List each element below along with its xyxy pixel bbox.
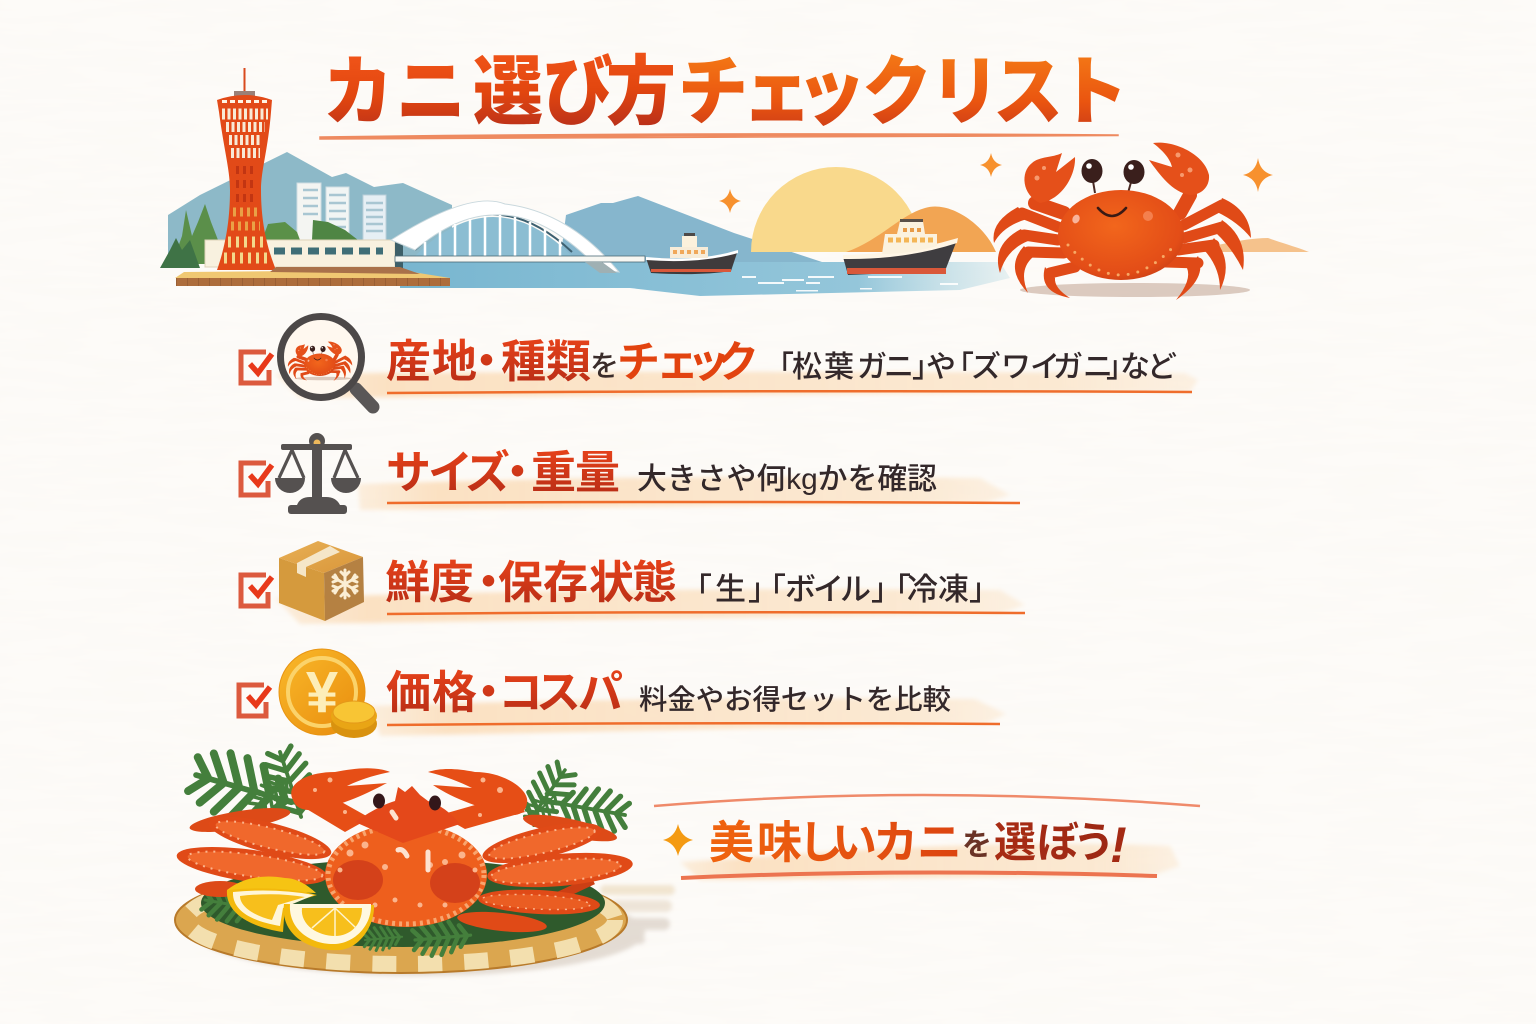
row 4 heading: 価格・コスパ	[386, 667, 623, 718]
row 1 heading check: チェック	[617, 339, 759, 387]
row 4 underline	[387, 723, 1000, 725]
office buildings	[297, 183, 386, 241]
crab platter	[175, 743, 675, 976]
crab legs right	[456, 809, 634, 936]
title: カニ選び方	[323, 51, 676, 135]
large ship	[843, 219, 958, 275]
closing message	[654, 795, 1200, 880]
bamboo plate	[175, 859, 627, 973]
row 1 underline	[387, 391, 1192, 393]
row 1 checkbox	[241, 352, 272, 383]
row 2 wash band	[358, 477, 1010, 510]
row 2 underline	[387, 502, 1020, 503]
plate shadow	[195, 885, 675, 976]
title: チェックリスト	[678, 51, 1128, 135]
low terminal building	[205, 240, 403, 268]
garnish sprigs	[185, 743, 631, 957]
row 3 checkbox	[241, 575, 272, 606]
small ship	[646, 233, 738, 274]
crab legs left	[175, 803, 335, 897]
row 1 particle: を	[590, 351, 619, 383]
arched bridge	[391, 201, 645, 273]
orange hills	[846, 206, 996, 252]
closing top stroke	[654, 795, 1200, 806]
row 3 detail: 「生」「ボイル」「冷凍」	[681, 572, 1000, 607]
checklist row 3	[241, 541, 1025, 624]
lemon wedges	[227, 876, 374, 950]
icon: yen coins	[279, 649, 377, 738]
pier	[175, 267, 450, 286]
row 3 heading: 鮮度・保存状態	[385, 557, 677, 608]
sparkle left	[719, 189, 741, 213]
row 2 checkbox	[241, 463, 272, 495]
row 4 detail: 料金やお得セットを比較	[639, 684, 951, 715]
setting sun	[751, 167, 921, 252]
row 1 detail: 「松葉ガニ」や「ズワイガニ」など	[764, 351, 1177, 384]
Kobe Port Tower	[217, 68, 276, 270]
title underline brush	[320, 134, 1118, 139]
smiling crab mascot	[994, 143, 1251, 300]
crab claws	[291, 768, 527, 832]
exclamation mark: !	[1110, 817, 1127, 873]
harbor water	[400, 262, 1010, 296]
green trees	[160, 204, 358, 268]
row 4 checkbox	[239, 685, 270, 716]
closing underline	[681, 872, 1157, 878]
water glints	[742, 276, 958, 292]
closing text red part: 美味しいカニ	[709, 817, 962, 868]
row 4 wash band	[370, 698, 1006, 736]
mountains behind bridge	[560, 196, 822, 262]
icon: magnifying glass with crab	[280, 316, 373, 407]
title	[323, 51, 1128, 135]
checklist row 1	[241, 316, 1198, 407]
icon: cold-storage box	[279, 541, 364, 621]
distant far-right hill	[1182, 238, 1309, 252]
sparkle near crab right	[1243, 158, 1273, 192]
row 2 detail: 大きさや何kgかを確認	[637, 463, 937, 496]
closing text particle: を	[962, 829, 992, 862]
Kobe harbor skyline	[160, 68, 1309, 296]
row 2 heading: サイズ・重量	[386, 447, 620, 498]
row 3 wash band	[275, 589, 1025, 624]
icon: balance scale	[275, 433, 361, 514]
row 3 underline	[387, 612, 1025, 614]
row 1 wash band	[275, 372, 1198, 398]
checklist row 2	[241, 433, 1020, 514]
crab shell	[325, 786, 487, 927]
mountains behind port	[168, 152, 452, 262]
closing text dark part: 選ぼう	[994, 819, 1115, 866]
closing sparkle	[663, 824, 693, 856]
icon: yen coins: ¥	[306, 660, 338, 725]
sparkle near crab left	[980, 153, 1002, 177]
row 1 heading: 産地・種類	[386, 336, 591, 387]
closing wash	[680, 844, 1180, 880]
checklist row 4	[239, 649, 1006, 738]
